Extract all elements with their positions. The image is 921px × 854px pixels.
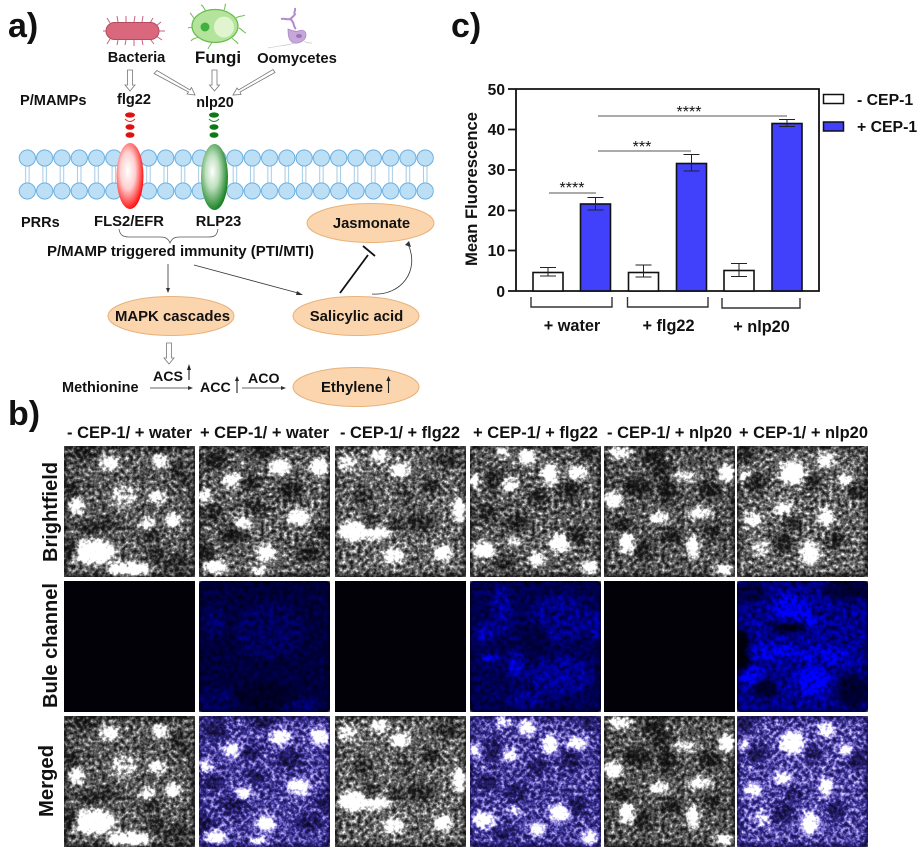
icon: bacteria xyxy=(103,16,165,46)
y axis numbers: 20 xyxy=(488,203,505,220)
organism labels: Fungi xyxy=(195,48,241,67)
legend: - CEP-1 xyxy=(857,92,913,109)
column headings: + CEP-1/ + flg22 xyxy=(473,424,598,442)
receptor labels: RLP23 xyxy=(196,214,241,230)
significance stars: **** xyxy=(560,180,584,197)
arrow heads xyxy=(166,241,411,390)
y axis numbers: 50 xyxy=(488,82,505,99)
row labels: Merged xyxy=(36,745,58,817)
y axis title: Mean Fluorescence xyxy=(462,112,481,266)
hollow arrows from organisms xyxy=(125,70,275,364)
group labels: + water xyxy=(544,317,601,335)
column headings: - CEP-1/ + flg22 xyxy=(340,424,460,442)
label: b): b) xyxy=(8,395,40,433)
group labels: + flg22 xyxy=(642,317,695,335)
group labels xyxy=(544,317,790,336)
y axis numbers: 10 xyxy=(488,243,505,260)
row labels: Bule channel xyxy=(40,583,62,708)
thin pathway arrows xyxy=(150,244,412,388)
immunity label: P/MAMP triggered immunity (PTI/MTI) xyxy=(47,244,314,260)
significance stars: **** xyxy=(677,104,701,121)
significance lines xyxy=(549,116,787,193)
ethylene biosynthesis labels: ACO xyxy=(248,371,280,387)
panel: immunity signalling pathway xyxy=(19,4,434,406)
organism labels xyxy=(108,48,337,67)
column headings: + CEP-1/ + nlp20 xyxy=(739,424,868,442)
column headings: + CEP-1/ + water xyxy=(200,424,330,442)
row labels xyxy=(36,462,62,817)
column headings: - CEP-1/ + nlp20 xyxy=(607,424,732,442)
ethylene biosynthesis labels: ACS xyxy=(153,369,183,385)
merged images xyxy=(60,715,868,847)
receptor: RLP23 xyxy=(201,112,228,210)
column headings: - CEP-1/ + water xyxy=(67,424,193,442)
y axis numbers: 40 xyxy=(488,122,505,139)
node: MAPK cascades xyxy=(108,296,234,336)
receptor labels xyxy=(21,214,241,231)
panel: microscopy grid xyxy=(36,424,871,847)
node: Salicylic acid: Salicylic acid xyxy=(310,309,403,325)
node: Salicylic acid xyxy=(293,296,419,336)
blue channel images xyxy=(64,581,871,714)
molecule labels xyxy=(20,92,234,111)
cell membrane xyxy=(19,149,434,201)
ethylene biosynthesis labels: ACC xyxy=(200,380,231,396)
receptor: FLS2/EFR xyxy=(116,112,144,209)
legend: + CEP-1 xyxy=(857,119,917,136)
icon: fungi xyxy=(188,4,246,49)
ethylene biosynthesis labels: Methionine xyxy=(62,380,139,396)
label: c): c) xyxy=(451,7,481,45)
receptor labels: FLS2/EFR xyxy=(94,214,164,230)
y axis numbers xyxy=(488,82,505,301)
row labels: Brightfield xyxy=(40,462,62,562)
organism labels: Oomycetes xyxy=(257,51,337,67)
icon: oomycete xyxy=(268,8,312,48)
bars xyxy=(533,124,802,291)
ethylene biosynthesis labels xyxy=(62,364,280,396)
group labels: + nlp20 xyxy=(733,318,790,336)
node: Jasmonate xyxy=(307,204,434,242)
brightfield images xyxy=(60,445,868,577)
panel: bar chart of mean fluorescence xyxy=(462,82,917,336)
molecule labels: P/MAMPs xyxy=(20,93,86,109)
molecule labels: flg22 xyxy=(117,92,151,108)
chart frame and ticks xyxy=(508,89,819,291)
significance stars xyxy=(560,104,701,197)
y axis numbers: 0 xyxy=(496,284,505,301)
node: Ethylene xyxy=(293,368,419,406)
node: Ethylene: Ethylene xyxy=(321,380,383,396)
receptor labels: PRRs xyxy=(21,215,60,231)
inhibition bar: salicylic acid inhibits jasmonate xyxy=(340,246,375,293)
node: MAPK cascades: MAPK cascades xyxy=(115,309,230,325)
y axis numbers: 30 xyxy=(488,162,505,179)
organism labels: Bacteria xyxy=(108,50,166,66)
error bars xyxy=(540,120,795,277)
column headings xyxy=(67,424,868,442)
legend xyxy=(824,92,917,136)
brace xyxy=(119,229,218,243)
label: a): a) xyxy=(8,7,38,45)
significance stars: *** xyxy=(633,139,651,156)
group brackets xyxy=(531,297,800,308)
node: Jasmonate: Jasmonate xyxy=(333,216,410,232)
molecule labels: nlp20 xyxy=(196,95,234,111)
